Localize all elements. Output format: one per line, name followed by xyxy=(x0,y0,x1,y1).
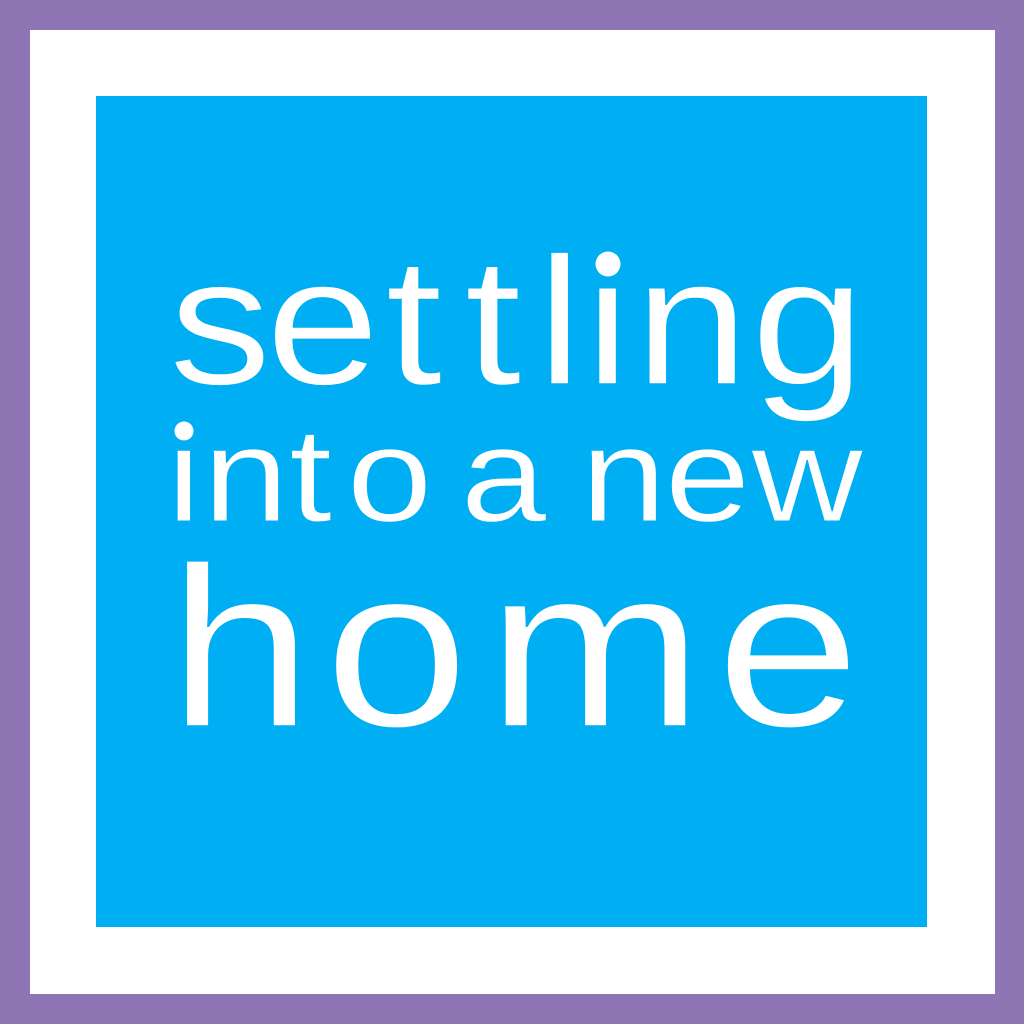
round dot on i in settling xyxy=(594,248,622,280)
title line: settling: settling xyxy=(169,220,865,423)
panel: blue square xyxy=(96,96,927,927)
title xyxy=(167,220,865,774)
round dot on i in into xyxy=(170,418,198,443)
title line: into a new: into a new xyxy=(167,399,864,550)
title line: home: home xyxy=(168,520,860,774)
